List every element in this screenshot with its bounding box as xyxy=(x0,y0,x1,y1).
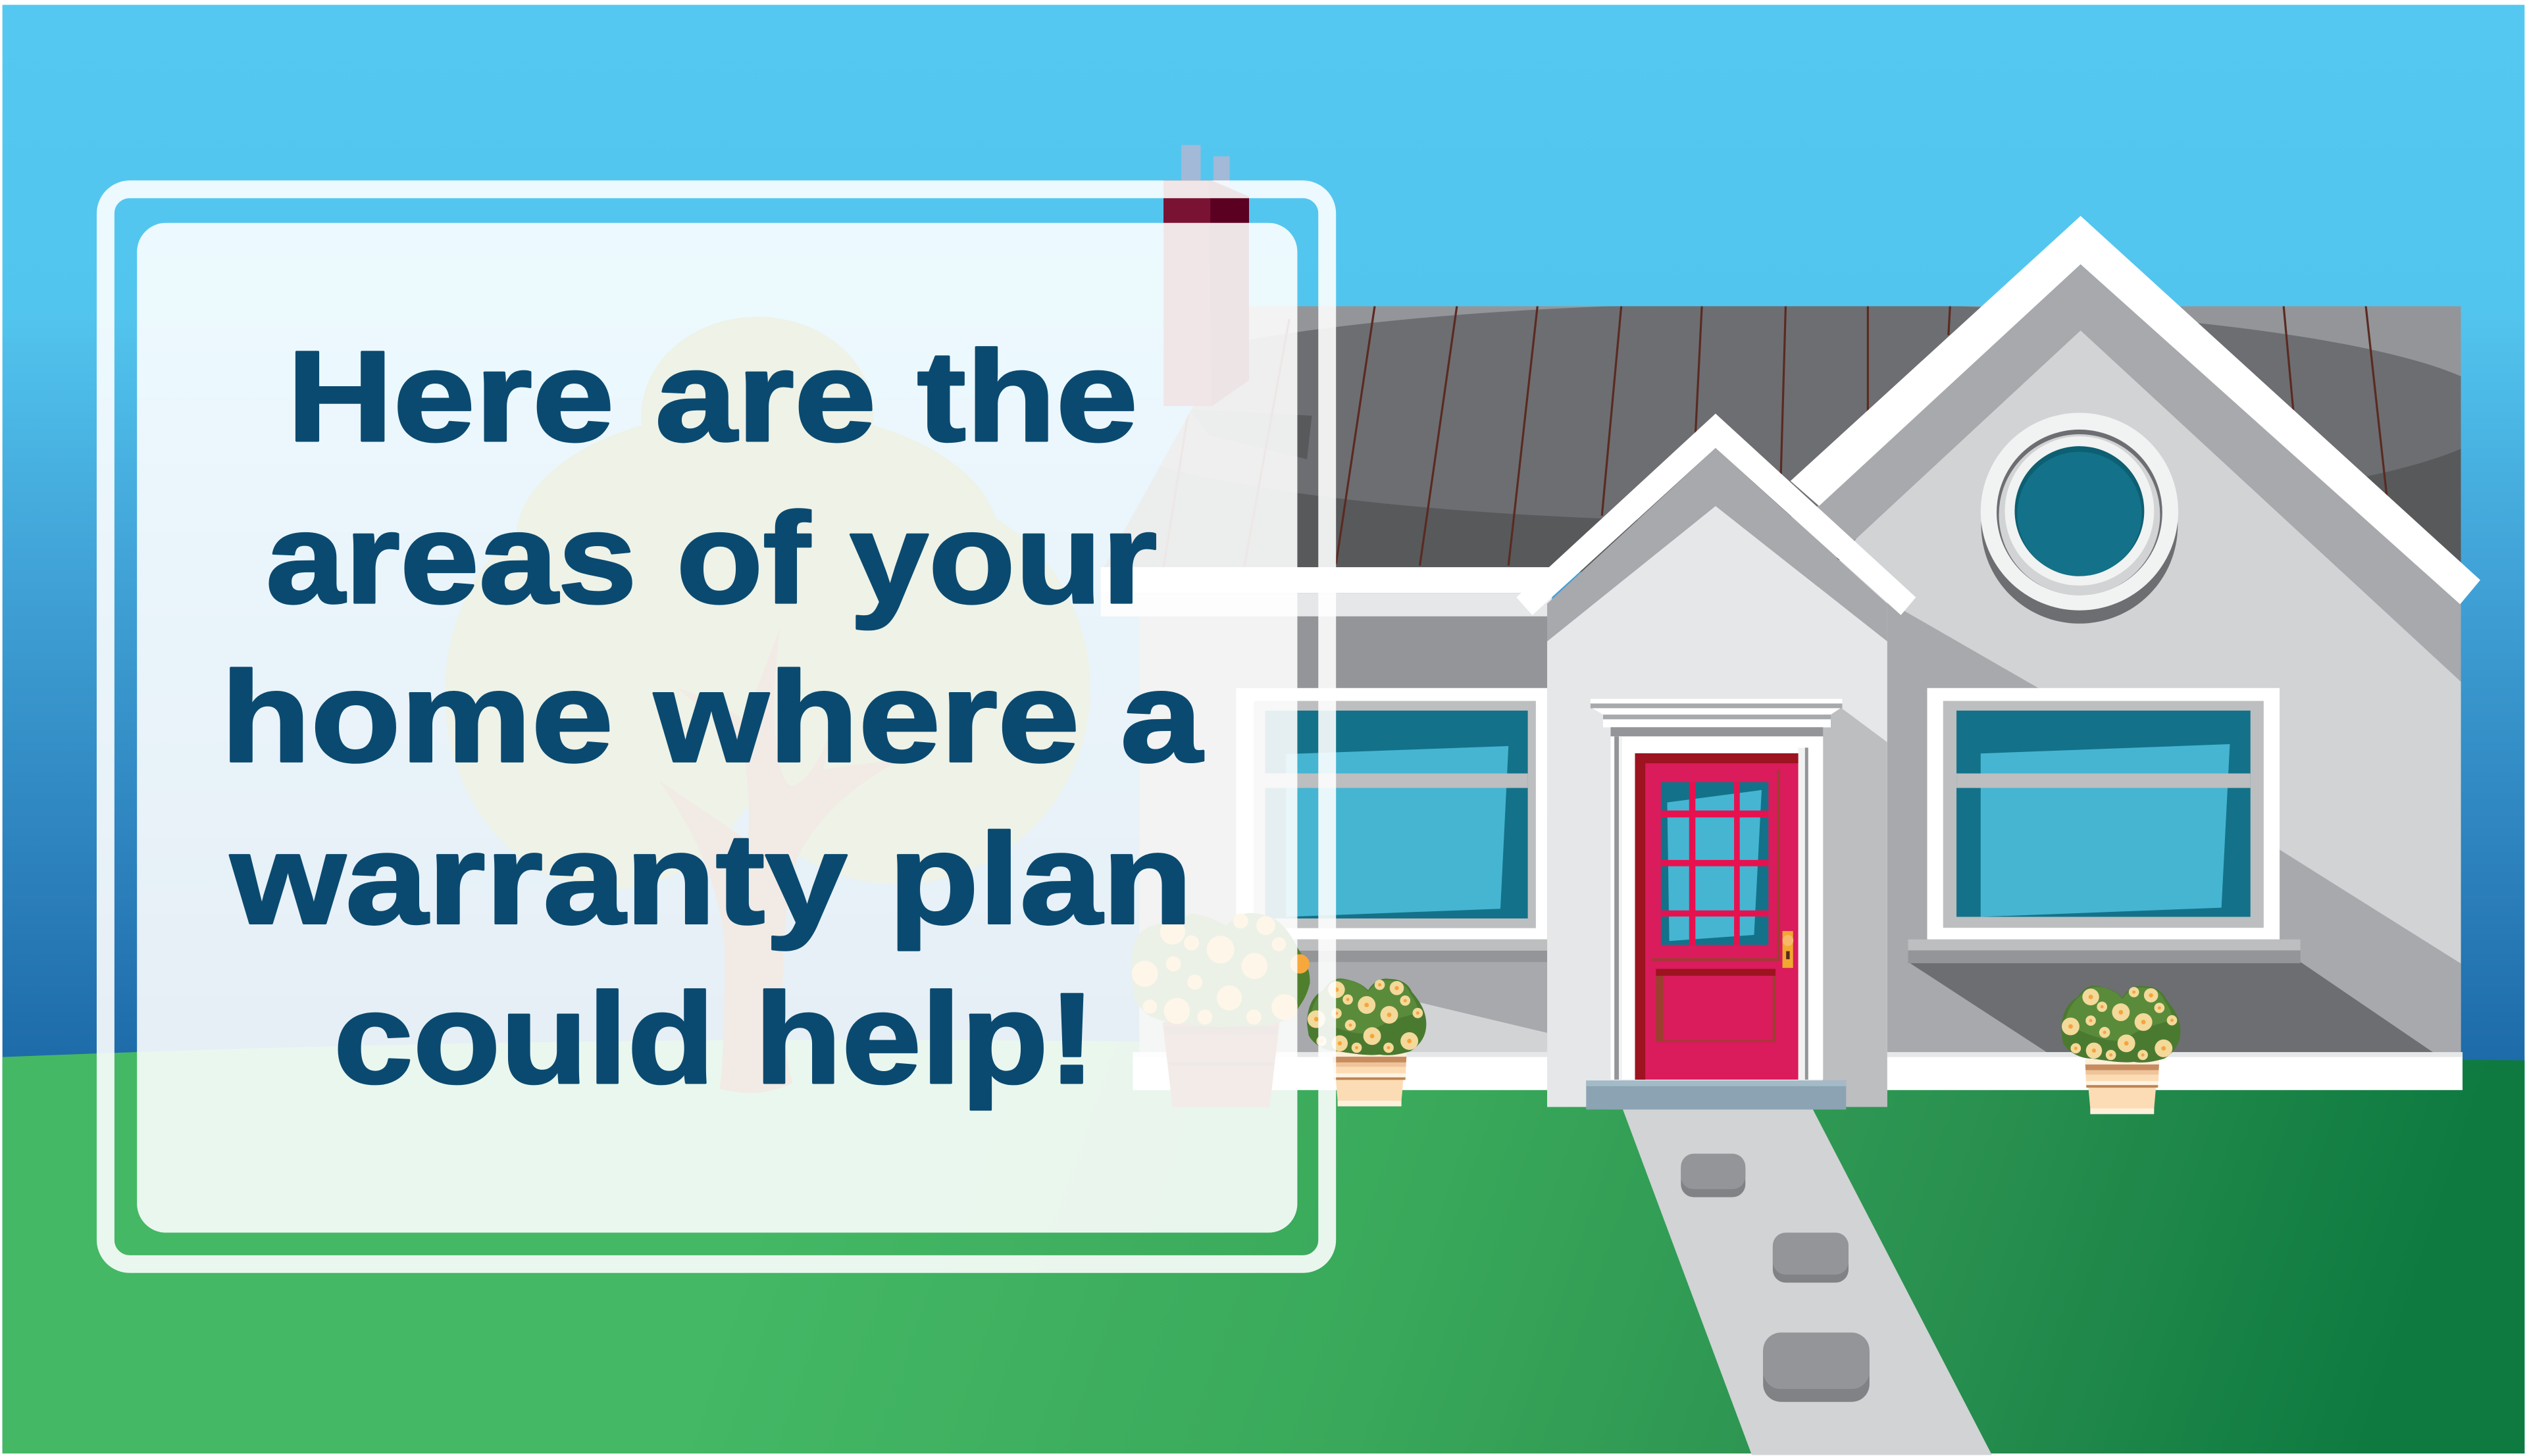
right window xyxy=(1908,688,2301,963)
tree behind the panel xyxy=(445,316,1090,1093)
walkway xyxy=(1622,1105,1992,1455)
door frame xyxy=(1611,736,1823,1080)
gable roof trim xyxy=(1791,216,2480,604)
panel: translucent message card xyxy=(105,189,1327,1264)
headline text: could help! xyxy=(334,966,1096,1111)
left wing wall xyxy=(1101,567,1552,1055)
headline text: warranty plan xyxy=(230,807,1192,951)
round attic window xyxy=(1981,413,2178,624)
grass lawn xyxy=(3,1040,2524,1453)
potted plant: right xyxy=(2061,986,2180,1114)
red front door xyxy=(1635,753,1799,1080)
door knob xyxy=(1783,931,1793,968)
front porch xyxy=(1516,414,1916,1107)
headline text: areas of your xyxy=(266,486,1157,630)
headline text: home where a xyxy=(221,645,1204,789)
door pediment xyxy=(1591,699,1842,737)
headline text: Here are the xyxy=(287,324,1138,468)
panel outer ring xyxy=(105,189,1327,1264)
main roof xyxy=(1067,303,2501,577)
main gable wall xyxy=(1773,264,2461,1055)
headline text xyxy=(221,324,1204,1111)
chimney xyxy=(1163,145,1249,406)
house xyxy=(1067,145,2501,1455)
panel inner card xyxy=(137,223,1297,1233)
potted plant: left xyxy=(1131,913,1310,1107)
left window xyxy=(1200,688,1547,962)
potted plant: middle xyxy=(1307,978,1426,1107)
door step xyxy=(1586,1080,1846,1109)
stepping stones xyxy=(1681,1154,1870,1402)
foundation strip xyxy=(1133,1052,2463,1090)
